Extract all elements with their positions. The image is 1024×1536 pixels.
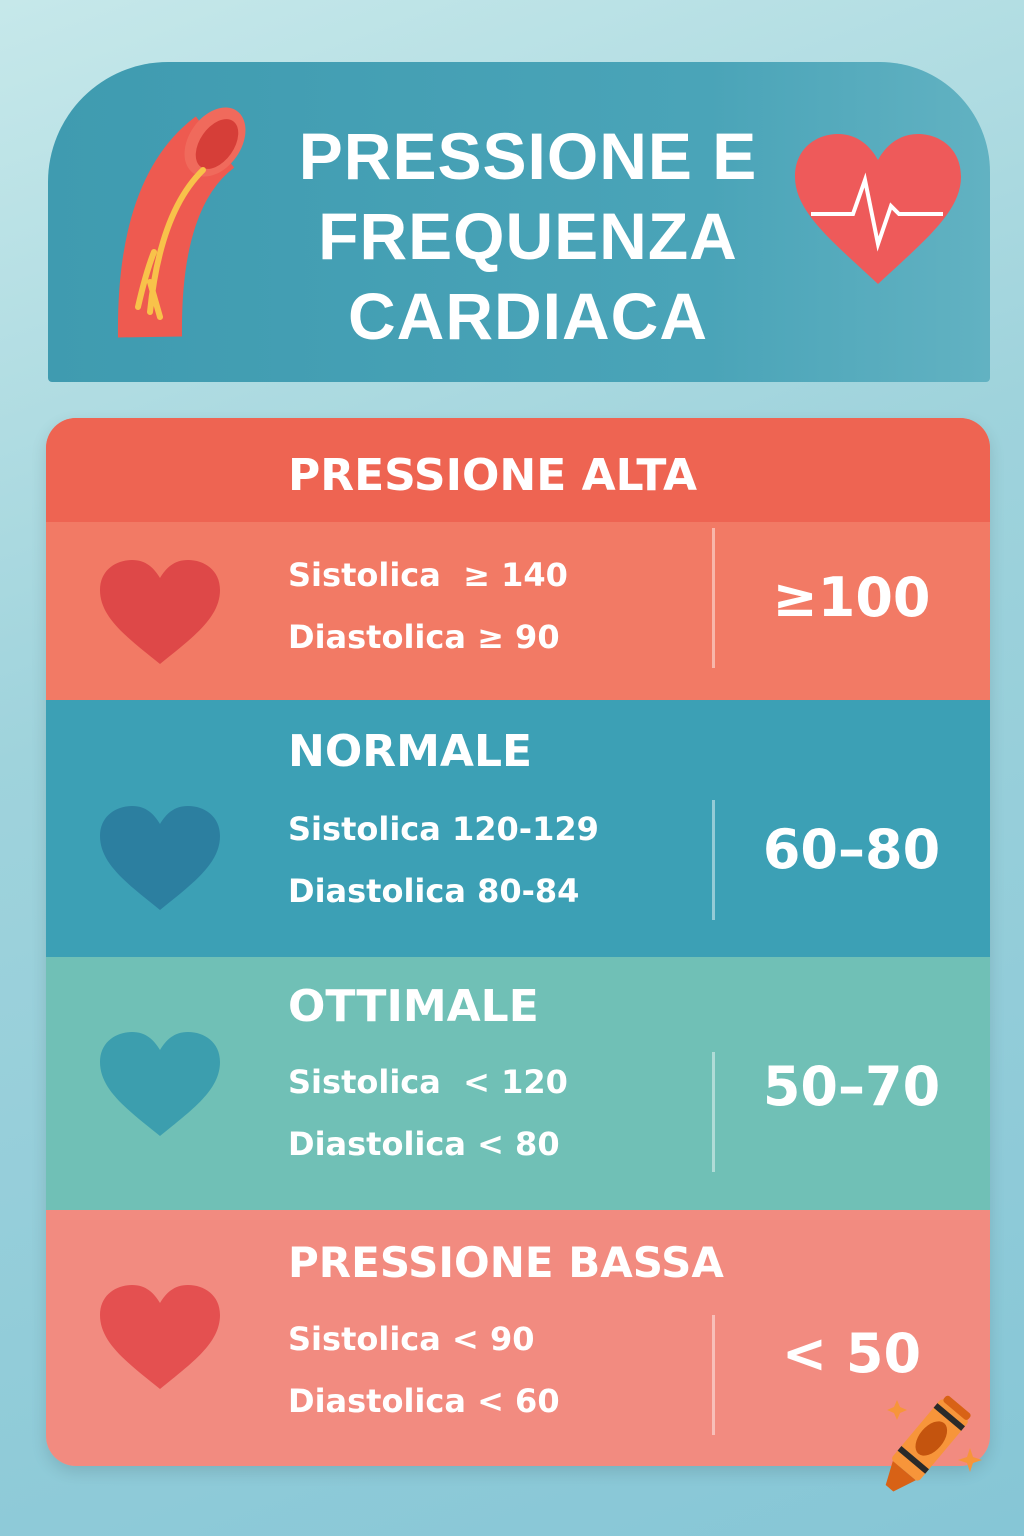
icon: heart with ecg: [794, 134, 961, 284]
panel: ottimale: 50–70: [763, 1055, 940, 1118]
header panel: [48, 62, 990, 382]
panel: pressione bassa: < 50: [782, 1322, 921, 1385]
panel: pressione bassa: Sistolica < 90: [288, 1320, 534, 1358]
panel: ottimale: Diastolica < 80: [288, 1125, 560, 1163]
panel: normale: [46, 700, 990, 957]
title: PRESSIONE E: [299, 119, 757, 193]
panel: normale: NORMALE: [288, 726, 532, 777]
panel: ottimale: [46, 957, 990, 1210]
icon: crayon: [886, 1396, 982, 1492]
title: [299, 119, 757, 353]
panel: ottimale: Sistolica < 120: [288, 1063, 568, 1101]
panel: normale: Diastolica 80-84: [288, 872, 579, 910]
main card: [46, 418, 990, 1466]
panel: normale: Sistolica 120-129: [288, 810, 599, 848]
panel: normale: 60–80: [763, 818, 940, 881]
panel: pressione alta: Diastolica ≥ 90: [288, 618, 560, 656]
panel: pressione alta: ≥100: [773, 566, 930, 629]
panel: pressione alta: PRESSIONE ALTA: [288, 450, 697, 501]
panel: pressione bassa: [46, 1210, 990, 1466]
panel: ottimale: OTTIMALE: [288, 981, 539, 1032]
title: FREQUENZA: [318, 199, 738, 273]
panel: pressione alta: [46, 418, 990, 700]
title: CARDIACA: [348, 279, 708, 353]
panel: pressione alta: Sistolica ≥ 140: [288, 556, 568, 594]
panel: pressione bassa: Diastolica < 60: [288, 1382, 560, 1420]
panel: pressione bassa: PRESSIONE BASSA: [288, 1238, 724, 1287]
icon: artery: [118, 108, 246, 338]
